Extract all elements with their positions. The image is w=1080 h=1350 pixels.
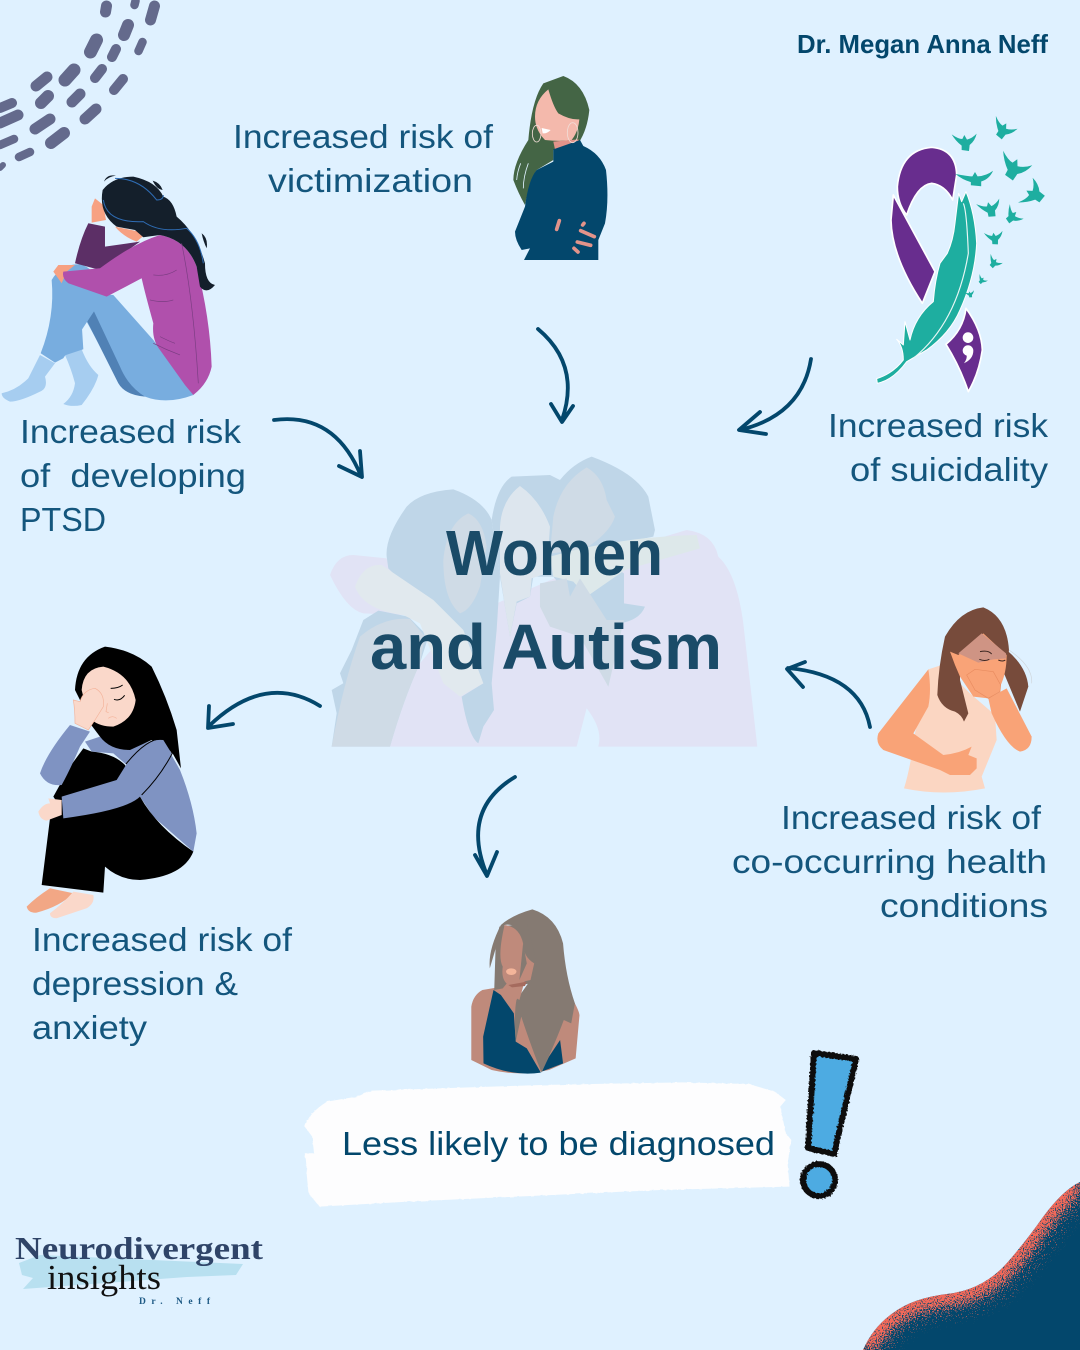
label: health conditions: co-occurring health [732,843,1047,880]
decorative dashes top left [0,1,154,168]
icon: exclamation mark [803,1053,856,1196]
label: health conditions: Increased risk of [781,799,1042,836]
arrow: from suicidality [739,359,811,434]
title: Women [446,517,663,589]
logo: Neurodivergent insights [15,1230,263,1307]
label: victimization: Increased risk of [233,118,494,155]
label: suicidality: Increased risk [828,407,1049,444]
banner text: Less likely to be diagnosed [342,1125,775,1162]
author name: Dr. Megan Anna Neff [797,29,1048,59]
label: depression and anxiety [32,921,293,1046]
label: PTSD [20,413,246,538]
logo: Neurodivergent insights: insights [47,1258,161,1297]
logo: Neurodivergent insights: Neurodivergent [15,1230,263,1266]
label: suicidality: of suicidality [850,451,1049,488]
decorative corner blob [863,1182,1080,1350]
arrow: to less likely diagnosed [475,777,515,876]
illustration: woman in hijab hugging knees (depression and anxiety) [27,647,197,918]
illustration: woman feeling sick (health conditions) [877,607,1032,792]
illustration: woman with long grey hair [471,909,579,1074]
title [370,517,722,683]
arrow: from victimization [538,329,573,422]
arrow: to depression and anxiety [208,693,320,728]
logo: Neurodivergent insights: Dr. Neff [139,1297,211,1307]
label: depression and anxiety: Increased risk of [32,921,293,958]
illustration: woman with head on knee (PTSD) [2,175,215,406]
title: and Autism [370,611,722,683]
label: PTSD: PTSD [20,501,106,538]
label: PTSD: Increased risk [20,413,242,450]
faded group of women behind title [330,457,757,747]
label: health conditions [732,799,1048,924]
arrow: from health conditions [787,662,870,727]
label: PTSD: of developing [20,457,246,494]
label: victimization: victimization [268,162,473,199]
illustration: woman with green hair (victimization) [513,76,607,260]
illustration: purple and teal awareness ribbon with birds [877,115,1050,392]
label: depression and anxiety: anxiety [32,1009,148,1046]
arrow: from PTSD [274,419,362,477]
label: suicidality [828,407,1049,488]
label: health conditions: conditions [880,887,1048,924]
label: depression and anxiety: depression & [32,965,238,1002]
label: victimization [233,118,494,199]
white brush banner [305,1082,791,1207]
